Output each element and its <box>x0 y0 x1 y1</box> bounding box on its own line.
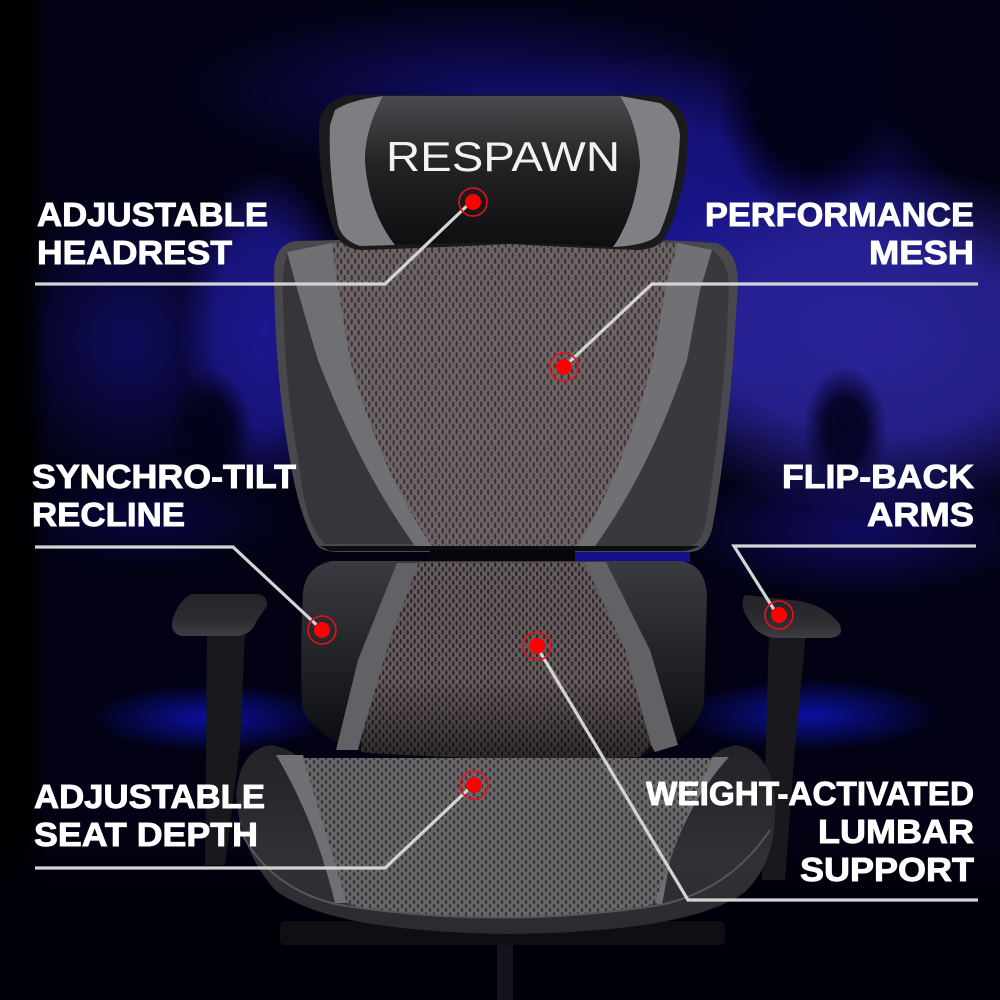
callout: adjustable headrest: ADJUSTABLE <box>37 196 268 233</box>
callout: performance mesh: PERFORMANCE <box>705 196 974 233</box>
callout: adjustable headrest: HEADREST <box>37 234 232 271</box>
callout: synchro-tilt recline: RECLINE <box>32 496 185 533</box>
callout: adjustable seat depth <box>34 771 488 868</box>
chair base <box>280 921 725 1000</box>
backrest <box>274 240 738 552</box>
lumbar support cushion <box>301 561 707 761</box>
callout: flip-back arms: ARMS <box>867 496 974 533</box>
callout: performance mesh: MESH <box>869 234 974 271</box>
callout: flip-back arms <box>734 458 976 629</box>
neck bracket <box>430 550 575 564</box>
callout: adjustable seat depth: SEAT DEPTH <box>34 816 258 853</box>
headrest <box>319 95 688 250</box>
callout: weight-activated lumbar support: SUPPORT <box>800 851 974 888</box>
seat mesh <box>303 758 713 917</box>
callout: synchro-tilt recline: SYNCHRO-TILT <box>32 458 296 495</box>
callout: performance mesh <box>550 196 978 381</box>
callout: weight-activated lumbar support <box>523 632 978 900</box>
callout: adjustable headrest <box>35 188 487 284</box>
callout: synchro-tilt recline <box>32 458 336 644</box>
seat <box>236 745 775 934</box>
right armrest <box>742 595 841 880</box>
logo: RESPAWN: RESPAWN <box>386 133 620 180</box>
callout: weight-activated lumbar support: LUMBAR <box>818 813 974 850</box>
left armrest <box>172 594 267 865</box>
performance mesh panel <box>332 243 678 546</box>
callout: weight-activated lumbar support: WEIGHT-ACTIVATED <box>646 775 974 812</box>
lumbar mesh <box>361 562 651 759</box>
chair <box>172 95 841 1000</box>
callout: adjustable seat depth: ADJUSTABLE <box>34 778 265 815</box>
callout: flip-back arms: FLIP-BACK <box>782 458 974 495</box>
